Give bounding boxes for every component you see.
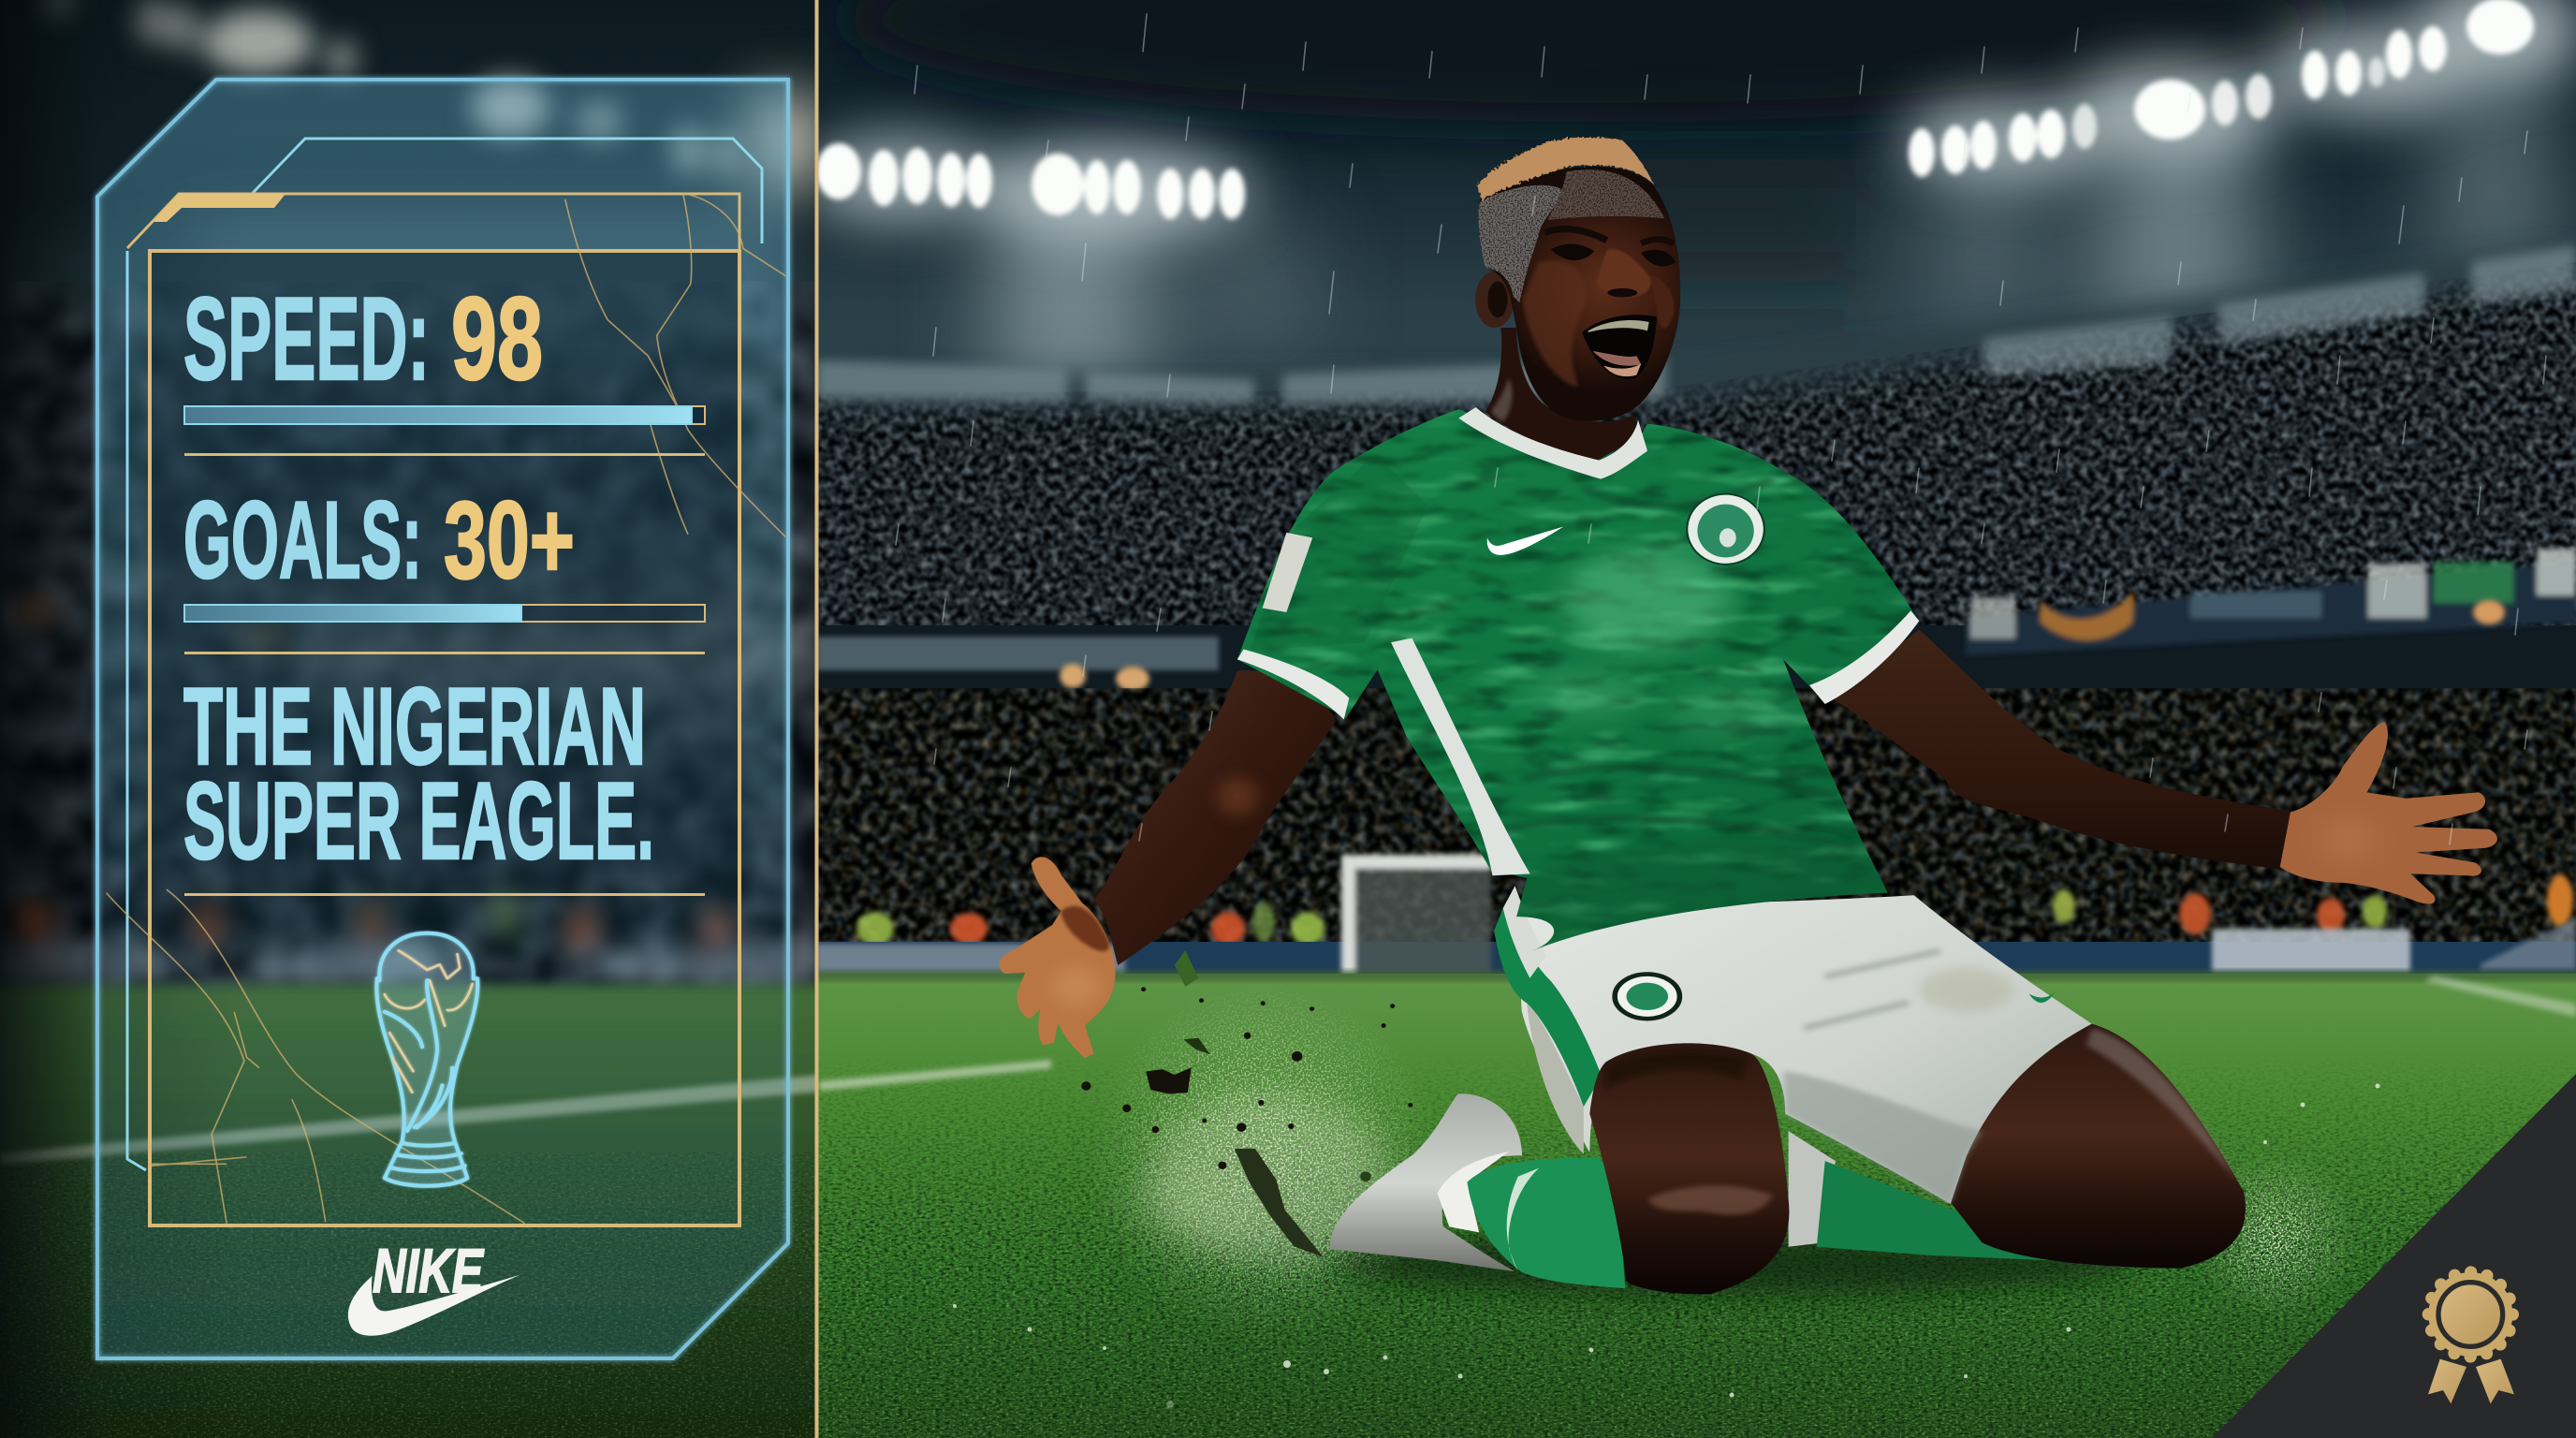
wet side fade and forehead — [1476, 166, 1669, 306]
panel: outer glass frame — [97, 80, 788, 1358]
contact shadow — [1329, 1232, 2134, 1296]
brows and eyes — [1544, 229, 1676, 266]
blurred crowd texture — [0, 281, 816, 992]
jersey side stripe — [1391, 638, 1530, 875]
panel: blue side line — [127, 251, 146, 1170]
gold crack lines — [107, 194, 785, 1224]
logo: nike: NIKE — [373, 1236, 484, 1305]
head, neck and collar — [1458, 137, 1680, 479]
jersey — [1229, 403, 1929, 960]
HUD glass stat panel — [97, 80, 788, 1358]
hair — [1477, 137, 1654, 201]
water droplets on turf — [953, 1084, 2379, 1408]
stat: speed label and value: SPEED: — [183, 274, 430, 404]
right sleeve cuff — [1809, 610, 1919, 704]
collar — [1458, 407, 1647, 479]
logo: nike — [348, 1236, 520, 1336]
divider — [184, 893, 705, 896]
player: celebrating knee slide — [896, 14, 2546, 1408]
gold vertical divider — [814, 0, 818, 1438]
pitch — [816, 974, 2576, 1438]
amber lamps — [1060, 664, 1086, 688]
far arm — [1831, 629, 2293, 870]
jersey fabric highlights — [1229, 403, 1929, 960]
left sleeve cuff — [1237, 649, 1349, 720]
panel: gold content frame — [150, 251, 739, 1225]
jersey swoosh — [1487, 526, 1563, 555]
nose — [1597, 249, 1651, 297]
face base — [1478, 167, 1680, 421]
blurred crowd colour spots — [0, 597, 816, 981]
far thigh — [1949, 1024, 2246, 1269]
stat: speed label and value: 98 — [451, 274, 543, 404]
left edge vignette — [0, 0, 816, 1438]
corner badge — [2212, 1074, 2576, 1438]
blurred haze and banners — [0, 94, 824, 712]
flying dirt clods — [1081, 950, 1412, 1257]
sleeve patch — [1263, 533, 1312, 612]
icon: swoosh — [348, 1275, 520, 1336]
tagline — [183, 665, 654, 882]
shorts side stripes — [1494, 886, 1602, 1154]
progress bar: speed — [184, 406, 705, 424]
icon: world cup trophy — [376, 933, 477, 1186]
background: stadium right side — [805, 0, 2576, 1438]
near leg: boot and sock — [1330, 1093, 1625, 1288]
near arm — [1094, 670, 1336, 965]
rain streaks — [896, 14, 2546, 844]
panel: inner blue frame line — [253, 139, 762, 243]
cheek highlight — [1523, 260, 1586, 387]
panel: gold header frame — [127, 194, 739, 251]
dark roof arc — [842, 0, 2340, 122]
right cheek — [1650, 274, 1675, 329]
soft crowd edge — [816, 262, 2576, 393]
near thigh and knee — [1589, 1043, 1789, 1294]
divider — [184, 453, 705, 456]
ear — [1475, 271, 1514, 328]
background: blurred stadium behind glass, left side — [0, 0, 880, 1438]
dark corner triangle — [2212, 1074, 2576, 1438]
upper crowd — [816, 253, 2576, 646]
blurred pitch line — [0, 1075, 821, 1165]
turf spray — [1127, 1093, 1389, 1260]
tagline: THE NIGERIAN — [183, 665, 646, 787]
blurred pitch — [0, 985, 880, 1438]
stat: goals label and value: GOALS: — [183, 478, 422, 601]
hi-vis stewards — [856, 874, 2573, 946]
far hand — [2280, 722, 2497, 904]
pitch lines — [819, 1060, 1051, 1091]
elbow highlight — [1217, 777, 1257, 815]
far thigh wet highlight — [2086, 1028, 2238, 1182]
near hand — [1000, 857, 1115, 1058]
panel: gold corner tab — [153, 194, 285, 222]
jersey crest — [1687, 494, 1764, 565]
far leg: sock and boot — [1789, 1131, 2076, 1261]
light haze beams — [992, 28, 2555, 403]
goal frame — [1341, 855, 1491, 976]
mid banner row — [816, 549, 2576, 670]
shorts — [1516, 895, 2092, 1204]
icon: gold award rosette — [2428, 1272, 2514, 1403]
neck — [1486, 328, 1638, 462]
stat: goals label and value: 30+ — [444, 478, 575, 601]
lower crowd — [816, 688, 2576, 946]
stadium floodlights right — [805, 0, 2576, 237]
tagline: SUPER EAGLE. — [183, 759, 654, 882]
progress bar: goals — [184, 605, 705, 622]
pitch-side LED boards — [816, 917, 2576, 981]
blurred floodlights — [43, 0, 740, 179]
tier shadow — [816, 625, 2576, 693]
shorts crest — [1615, 975, 1679, 1019]
divider — [184, 652, 705, 654]
stand banner strips — [816, 245, 2576, 404]
open mouth — [1582, 315, 1657, 379]
